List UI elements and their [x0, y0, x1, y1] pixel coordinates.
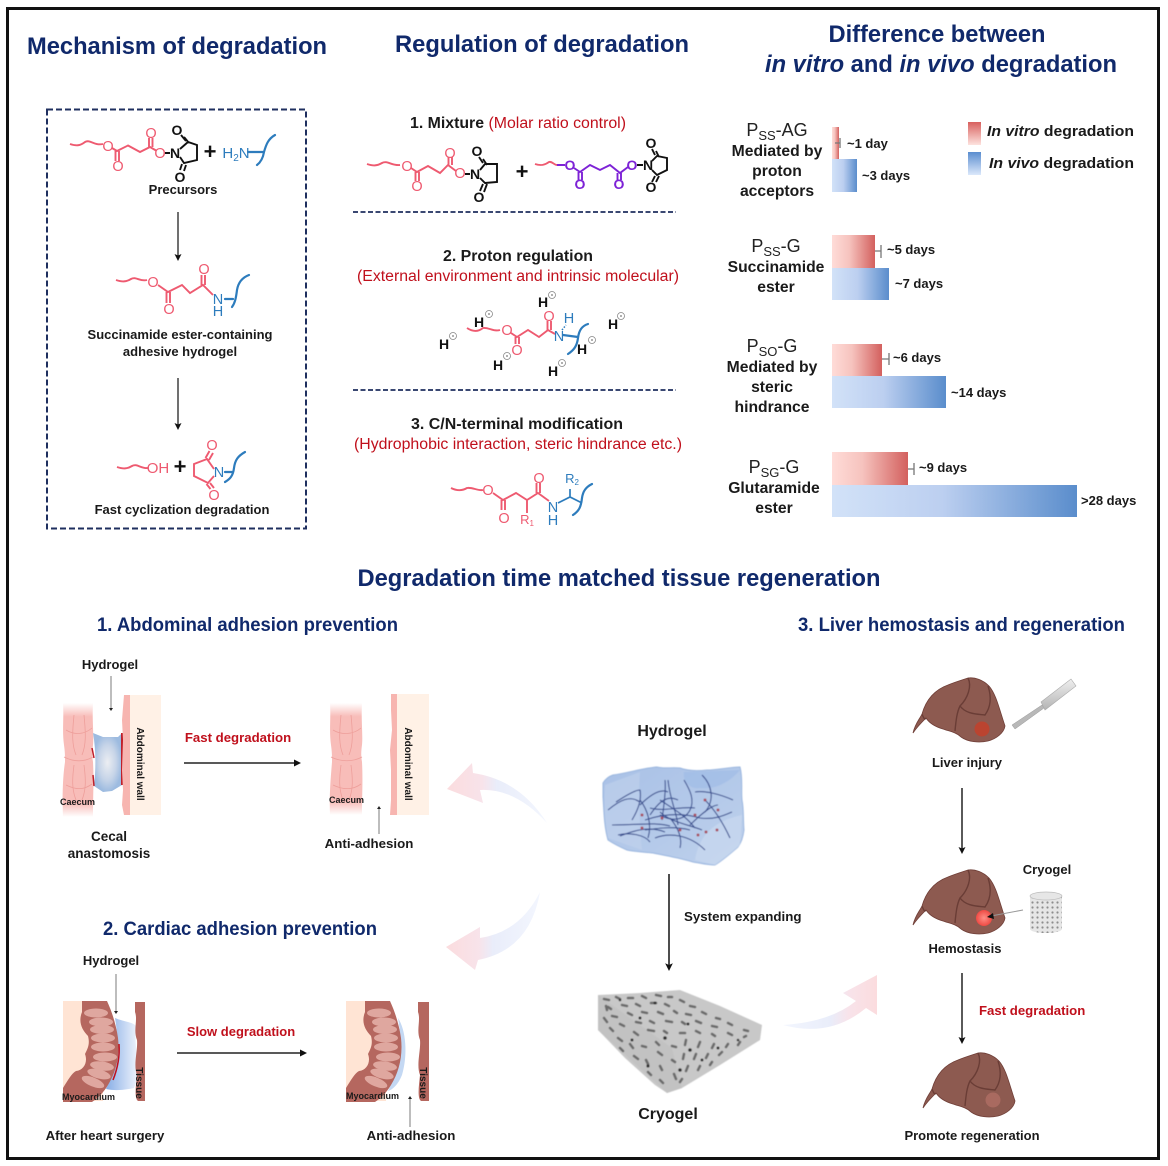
chemical: precursors: O	[172, 122, 183, 138]
chemical: succinamide ester hydrogel	[116, 262, 249, 320]
group: PSS-G: SS	[763, 244, 781, 259]
group: PSG-G: P	[749, 457, 761, 477]
arrow: fast degradation	[958, 973, 1085, 1044]
illustration: regenerating liver	[923, 1053, 1015, 1117]
heading: difference: in vitro and in vivo degradation	[765, 51, 1117, 78]
group: PSS-G: P	[751, 236, 763, 256]
label: cecal anastomosis: Cecal	[91, 829, 127, 844]
group: PSG-G: -G	[779, 457, 799, 477]
group: PSO-G: ~6 days	[893, 350, 941, 365]
label: anti-adhesion: Anti-adhesion	[367, 1128, 455, 1143]
protons: H	[548, 363, 558, 379]
chemical: precursors: H	[222, 145, 233, 162]
heading: difference: Difference between	[828, 21, 1046, 48]
group: PSS-AG: -AG	[776, 120, 808, 140]
chemical: cyclization product: +	[174, 454, 186, 479]
label: succinamide hydrogel: Succinamide ester-containing	[88, 327, 273, 342]
chemical: cyclization product: O	[206, 438, 218, 454]
chemical: proton regulation: O	[501, 323, 513, 339]
group: PSS-G	[728, 235, 943, 300]
label: liver injury: Liver injury	[932, 755, 1003, 770]
illustration: myocardium with hydrogel: Myocardium	[62, 1092, 115, 1102]
group: PSG-G: Glutaramide	[728, 480, 820, 497]
label: succinamide hydrogel	[88, 327, 273, 359]
chemical: precursors: 2	[233, 153, 239, 164]
heading: difference	[765, 21, 1117, 78]
item 3 title: (Hydrophobic interaction, steric hindrance etc.)	[354, 436, 682, 453]
chemical: C/N-terminal modification: N	[548, 500, 558, 516]
protons: H	[439, 336, 449, 352]
arrow: slow degradation: Slow degradation	[187, 1024, 295, 1039]
label: hydrogel: Hydrogel	[83, 953, 139, 968]
icon: cryogel cylinder	[1030, 892, 1062, 933]
faint arrow: to abdominal	[447, 763, 547, 823]
group: PSS-G: Succinamide	[728, 259, 825, 276]
illustration: injured liver	[913, 678, 1005, 742]
panel: hydrogel to cryogel	[598, 723, 802, 1123]
chemical: mixture: +	[516, 159, 528, 184]
chemical: mixture: N	[470, 166, 480, 182]
chemical: C/N-terminal modification: 2	[574, 478, 579, 487]
group: PSS-AG: Mediated by	[732, 143, 823, 160]
heading: regulation: Regulation of degradation	[395, 31, 689, 58]
group: PSS-AG: ~1 day	[847, 136, 889, 151]
label: cryogel: Cryogel	[1023, 862, 1071, 877]
illustration: caecum with hydrogel	[60, 695, 161, 817]
arrow: system expanding	[665, 874, 802, 971]
chemical: proton regulation: N	[554, 329, 564, 345]
group: PSO-G: SO	[759, 344, 777, 359]
group: PSG-G: >28 days	[1081, 493, 1136, 508]
legend: In vitro degradation	[987, 123, 1134, 140]
heading: abdominal: 1. Abdominal adhesion prevention	[97, 615, 398, 636]
label: after heart surgery: After heart surgery	[46, 1128, 165, 1143]
illustration: caecum after degradation	[329, 694, 429, 815]
chemical: proton regulation: O	[543, 309, 555, 325]
chemical: precursors: O	[145, 126, 157, 142]
chemical: succinamide ester hydrogel: O	[198, 262, 210, 278]
chemical: precursors: +	[204, 139, 216, 164]
chemical: mixture: O	[575, 176, 586, 192]
group: PSG-G	[728, 452, 1136, 517]
protons: H	[577, 341, 587, 357]
heading: cardiac: 2. Cardiac adhesion prevention	[103, 919, 377, 940]
chemical: mixture	[367, 135, 667, 205]
protons: H	[608, 316, 618, 332]
legend: In vivo degradation	[989, 155, 1134, 172]
group: PSO-G: P	[747, 336, 759, 356]
item 3 title	[354, 416, 682, 453]
chemical: cyclization product	[117, 438, 245, 504]
label: succinamide hydrogel: adhesive hydrogel	[123, 344, 237, 359]
arrow: hydrogel to degradation	[174, 378, 182, 430]
group: PSO-G: -G	[777, 336, 797, 356]
panel: abdominal adhesion prevention	[60, 615, 429, 861]
chemical: C/N-terminal modification: R	[520, 512, 529, 527]
chemical: proton regulation: H	[564, 311, 574, 327]
chemical: cyclization product: O	[208, 488, 220, 504]
label: cecal anastomosis	[68, 829, 150, 861]
label: cryogel: Cryogel	[638, 1106, 698, 1123]
chemical: cyclization product: N	[214, 465, 224, 481]
chemical: mixture: O	[474, 189, 485, 205]
heading: mechanism: Mechanism of degradation	[27, 33, 327, 60]
group: PSS-AG	[732, 120, 910, 200]
arrow: hydrogel pointer	[114, 974, 118, 1014]
panel: liver hemostasis and regeneration	[798, 615, 1125, 1143]
chemical: mixture: O	[454, 166, 466, 182]
label: hydrogel: Hydrogel	[637, 723, 707, 740]
chemical: succinamide ester hydrogel: O	[163, 302, 175, 318]
label: cecal anastomosis: anastomosis	[68, 846, 150, 861]
illustration: myocardium after degradation: Myocardium	[346, 1091, 399, 1101]
group: PSS-G: ~5 days	[887, 242, 935, 257]
protons: H	[538, 294, 548, 310]
group: PSO-G: ~14 days	[951, 385, 1006, 400]
item 2 title: 2. Proton regulation	[443, 248, 593, 265]
panel: in vitro vs in vivo chart	[727, 21, 1136, 517]
label: precursors: Precursors	[149, 182, 217, 197]
icon: surgical tool	[1012, 679, 1076, 729]
arrow: fast degradation: Fast degradation	[979, 1003, 1085, 1018]
group: PSS-G: ~7 days	[895, 276, 943, 291]
chemical: succinamide ester hydrogel: H	[213, 304, 223, 320]
chemical: mixture: O	[401, 159, 413, 175]
section heading: tissue regeneration: Degradation time matched tissue regeneration	[358, 565, 880, 592]
group: PSS-AG: SS	[758, 128, 776, 143]
faint arrow: to cardiac	[446, 892, 540, 970]
chemical: C/N-terminal modification: H	[548, 513, 558, 529]
protons: H	[493, 357, 503, 373]
arrow: hydrogel pointer	[109, 676, 113, 711]
illustration: caecum with hydrogel: Caecum	[60, 797, 95, 807]
chemical: proton regulation: O	[511, 343, 523, 359]
item 2 title: (External environment and intrinsic molecular)	[357, 268, 679, 285]
chemical: precursors: N	[239, 145, 250, 162]
group: PSS-AG: acceptors	[740, 183, 814, 200]
arrow: system expanding: System expanding	[684, 909, 802, 924]
chemical: mixture: O	[646, 135, 657, 151]
group: PSS-AG: ~3 days	[862, 168, 910, 183]
chemical: C/N-terminal modification: O	[498, 511, 510, 527]
label: hydrogel: Hydrogel	[82, 657, 138, 672]
dashed box	[47, 110, 306, 528]
group: PSO-G: hindrance	[735, 399, 810, 416]
protons: H	[474, 314, 484, 330]
faint arrow: to liver	[783, 975, 877, 1029]
label: anti-adhesion: Anti-adhesion	[325, 836, 413, 851]
illustration: caecum after degradation: Abdominal wall	[402, 727, 413, 801]
group: PSO-G	[727, 336, 1006, 416]
illustration: myocardium with hydrogel: Tissue	[133, 1067, 144, 1099]
chemical: precursors: O	[175, 169, 186, 185]
chemical: C/N-terminal modification: O	[482, 483, 494, 499]
chemical: precursors: O	[102, 139, 114, 155]
chemical: succinamide ester hydrogel: N	[213, 292, 223, 308]
arrow: slow degradation	[177, 1024, 307, 1056]
chemical: C/N-terminal modification: R	[565, 471, 574, 486]
group: PSO-G: steric	[751, 379, 793, 396]
arrow: injury to hemostasis	[958, 788, 966, 854]
legend	[968, 122, 1134, 175]
group: PSS-G: -G	[781, 236, 801, 256]
panel: mechanism of degradation	[27, 33, 327, 528]
illustration: myocardium after degradation	[346, 1001, 429, 1102]
illustration: caecum after degradation: Caecum	[329, 795, 364, 805]
group: PSS-AG: P	[746, 120, 758, 140]
group: PSS-AG: proton	[752, 163, 802, 180]
chemical: C/N-terminal modification	[451, 471, 592, 529]
chemical: precursors: O	[112, 159, 124, 175]
chemical: precursors: O	[154, 146, 166, 162]
illustration: liver with cryogel	[913, 870, 1023, 934]
chemical: C/N-terminal modification: O	[533, 471, 545, 487]
chemical: mixture: N	[643, 157, 653, 173]
arrow: fast degradation	[184, 730, 301, 766]
illustration: hydrogel block	[603, 767, 744, 865]
label: promote regeneration: Promote regeneration	[904, 1128, 1040, 1143]
chemical: precursors	[70, 122, 275, 185]
chemical: precursors: N	[170, 145, 180, 161]
illustration: cryogel block	[598, 990, 762, 1093]
label: anti-adhesion	[367, 1096, 455, 1143]
chemical: mixture: O	[444, 146, 456, 162]
group: PSO-G: Mediated by	[727, 359, 818, 376]
panel: regulation of degradation	[353, 31, 689, 529]
protons	[439, 292, 624, 379]
panel: cardiac adhesion prevention	[46, 919, 455, 1143]
chemical: proton regulation	[467, 309, 588, 359]
group: PSS-G: ester	[757, 279, 795, 296]
chemical: mixture: O	[472, 143, 483, 159]
chemical: C/N-terminal modification: 1	[529, 519, 534, 528]
group: PSG-G: ester	[755, 500, 793, 517]
chemical: cyclization product: OH	[147, 460, 169, 477]
label: hemostasis: Hemostasis	[929, 941, 1001, 956]
item 3 title: 3. C/N-terminal modification	[411, 416, 623, 433]
illustration: myocardium with hydrogel	[62, 1001, 145, 1102]
chemical: mixture: O	[627, 157, 638, 173]
heading: liver: 3. Liver hemostasis and regeneration	[798, 615, 1125, 636]
chemical: succinamide ester hydrogel: O	[147, 275, 159, 291]
item 2 title	[357, 248, 679, 285]
arrow: precursors to hydrogel	[174, 212, 182, 261]
group: PSG-G: SG	[761, 465, 779, 480]
chemical: mixture: O	[565, 157, 576, 173]
label: anti-adhesion	[325, 806, 413, 851]
group: PSG-G: ~9 days	[919, 460, 967, 475]
chemical: mixture: O	[646, 179, 657, 195]
item 1 title: 1. Mixture (Molar ratio control)	[410, 115, 626, 132]
label: fast cyclization: Fast cyclization degradation	[95, 502, 269, 517]
illustration: myocardium after degradation: Tissue	[417, 1067, 428, 1099]
arrow: fast degradation: Fast degradation	[185, 730, 291, 745]
chemical: mixture: O	[614, 176, 625, 192]
chemical: mixture: O	[411, 179, 423, 195]
illustration: caecum with hydrogel: Abdominal wall	[134, 727, 145, 801]
